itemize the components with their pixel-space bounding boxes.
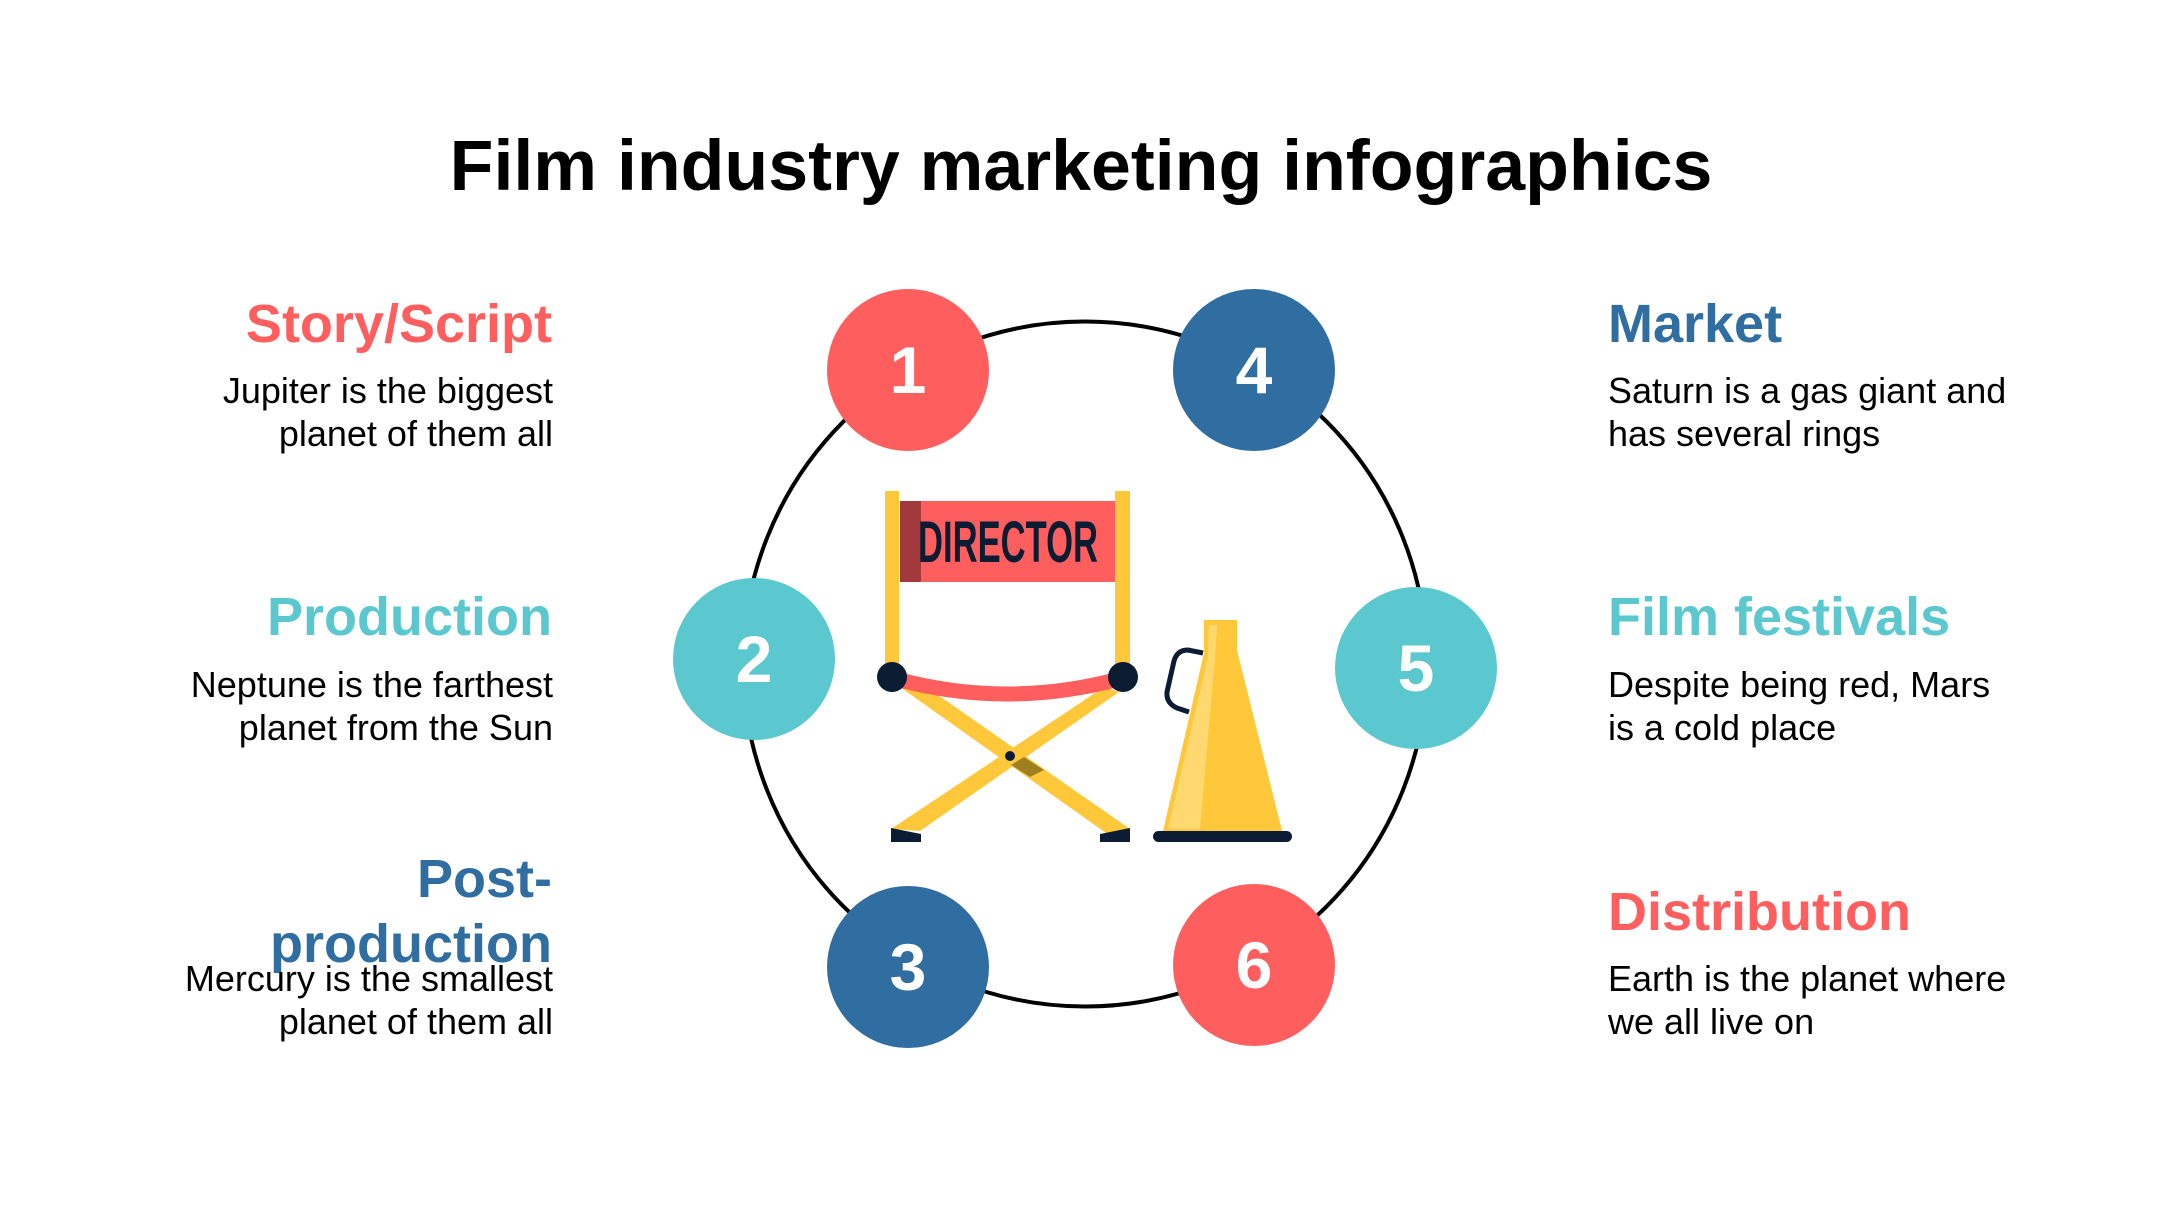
text block: Distribution: we all live on — [1607, 1001, 1814, 1042]
text block: Story/Script: Jupiter is the biggest — [223, 370, 553, 411]
text block: Distribution: Distribution — [1608, 882, 1911, 942]
chair leg shadow — [1011, 757, 1044, 777]
megaphone base — [1153, 831, 1292, 842]
text block: Film festivals: Despite being red, Mars — [1608, 664, 1990, 705]
megaphone cone — [1163, 620, 1282, 831]
step 3 badge: 3 — [890, 930, 926, 1004]
megaphone handle — [1167, 650, 1203, 712]
text block: Distribution — [1607, 882, 2006, 1042]
text block: Post-production: planet of them all — [279, 1001, 553, 1042]
text block: Production — [191, 587, 553, 748]
chair feet — [891, 828, 1130, 842]
chair joints — [877, 662, 1138, 761]
text block: Post-production — [185, 849, 553, 1042]
title: Film industry marketing infographics — [450, 126, 1712, 206]
step 2 badge — [673, 578, 835, 740]
chair seat — [896, 679, 1119, 694]
text block: Story/Script: Story/Script — [246, 294, 552, 354]
icon: director chair — [877, 491, 1138, 842]
megaphone highlight — [1168, 625, 1217, 829]
step 6 badge: 6 — [1236, 928, 1272, 1002]
step 6 badge — [1173, 884, 1335, 1046]
text block: Market — [1608, 294, 2006, 454]
text block: Production: planet from the Sun — [239, 707, 553, 748]
text block: Production: Production — [267, 587, 552, 647]
step 1 badge: 1 — [890, 333, 926, 407]
text block: Market: has several rings — [1608, 413, 1880, 454]
text block: Film festivals — [1608, 587, 1990, 748]
step 3 badge — [827, 886, 989, 1048]
text block: Market: Saturn is a gas giant and — [1608, 370, 2006, 411]
text block: Distribution: Earth is the planet where — [1608, 958, 2006, 999]
chair banner: DIRECTOR — [918, 510, 1098, 575]
text block: Post-production: Post- — [417, 849, 552, 909]
chair legs — [890, 672, 1130, 833]
step 2 badge: 2 — [736, 622, 772, 696]
text block: Post-production: production — [270, 914, 552, 974]
step 4 badge — [1173, 289, 1335, 451]
step 1 badge — [827, 289, 989, 451]
text block: Film festivals: is a cold place — [1608, 707, 1836, 748]
text block: Post-production: Mercury is the smallest — [185, 958, 553, 999]
icon: megaphone — [1153, 620, 1292, 842]
step 5 badge — [1335, 587, 1497, 749]
text block: Story/Script — [223, 294, 553, 454]
chair posts — [885, 491, 1130, 676]
chair banner — [900, 501, 1115, 582]
ring connecting the steps — [743, 322, 1427, 1006]
step 4 badge: 4 — [1236, 333, 1273, 407]
step 5 badge: 5 — [1398, 631, 1434, 705]
text block: Production: Neptune is the farthest — [191, 664, 553, 705]
text block: Market: Market — [1608, 294, 1782, 354]
text block: Film festivals: Film festivals — [1608, 587, 1950, 647]
text block: Story/Script: planet of them all — [279, 413, 553, 454]
